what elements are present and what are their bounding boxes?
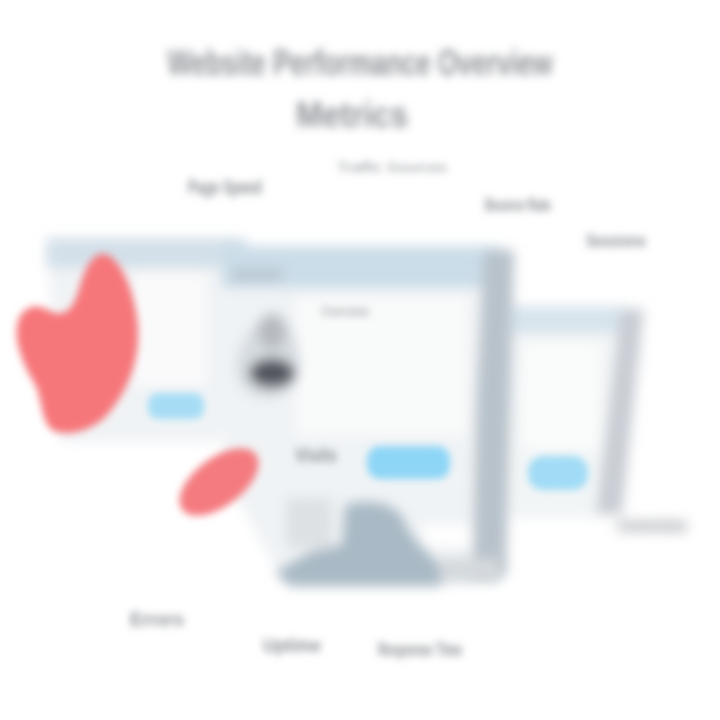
small grey text in monitor: Visits xyxy=(295,445,337,467)
dark drop base xyxy=(249,358,295,388)
icon: dark drop xyxy=(236,310,299,398)
label: bottom right center: Response Time xyxy=(378,640,462,661)
right window edge xyxy=(596,308,644,514)
text line under icon: Overview xyxy=(321,303,370,319)
monitor content xyxy=(296,296,468,436)
monitor right edge xyxy=(472,250,514,578)
title xyxy=(168,42,553,135)
label: top left: Page Speed xyxy=(188,177,262,199)
monitor stand xyxy=(276,498,500,586)
blue button: center xyxy=(367,446,450,479)
label: top right: Bounce Rate xyxy=(485,195,551,215)
left window header xyxy=(46,238,246,268)
label: top center: Traffic Sources xyxy=(337,159,447,175)
title: Metrics xyxy=(296,94,408,135)
monitor lower white xyxy=(422,525,472,547)
red pill xyxy=(168,435,270,529)
label: bottom center: Uptime xyxy=(263,636,321,657)
right window content xyxy=(522,342,600,450)
title: Website Performance Overview xyxy=(168,42,553,83)
blue button: left xyxy=(148,393,204,419)
blue button: right xyxy=(528,456,588,490)
small grey text in monitor xyxy=(295,303,370,467)
panel: right browser window xyxy=(505,306,644,518)
panel: left browser window xyxy=(46,238,246,442)
large red heart shape xyxy=(17,254,138,433)
right window header xyxy=(505,306,630,334)
label: bottom left: Errors xyxy=(130,610,184,631)
monitor header tab xyxy=(232,268,282,282)
monitor header xyxy=(222,246,500,288)
label: far right: Sessions xyxy=(586,231,646,251)
left window content area xyxy=(132,274,206,386)
panel: center monitor xyxy=(222,246,514,582)
